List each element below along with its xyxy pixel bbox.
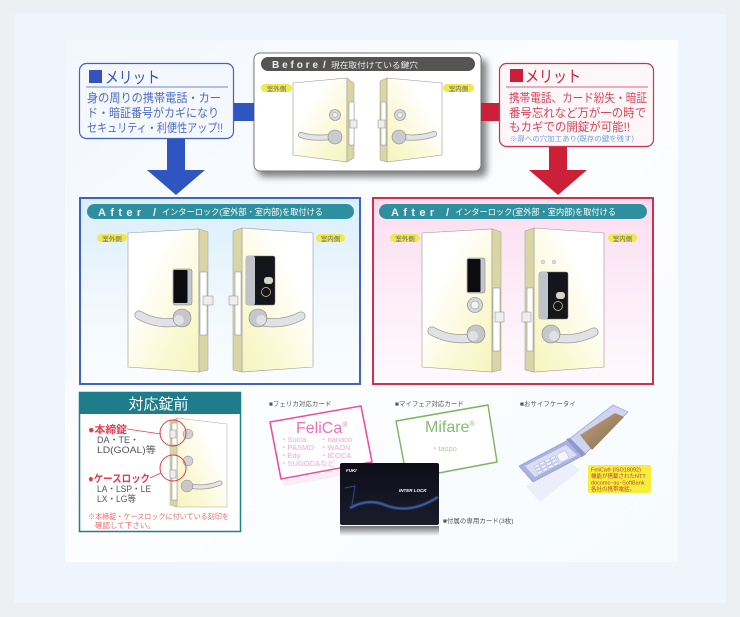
heading: merit blue — [89, 70, 160, 87]
icon: card reader — [467, 258, 485, 293]
text: merit red body: 携帯電話、カード紛失・暗証 — [509, 90, 647, 105]
arrow: red down — [529, 147, 587, 195]
label: indoor side — [316, 234, 345, 243]
callout: main lock: ●本締錠 — [88, 423, 128, 436]
card: FeliCa: ® — [342, 421, 348, 429]
text: merit red body: 番号忘れなど万が一の時で — [509, 105, 646, 120]
note: red merit: ※扉への穴加工あり(既存の鍵を残す) — [510, 134, 634, 143]
panel: red merit — [500, 64, 654, 146]
callout: FeliCa phones — [588, 465, 651, 493]
panel: after blue — [80, 198, 360, 384]
card: Inter Lock: INTER LOCK — [399, 488, 427, 493]
arrow: blue down — [147, 139, 205, 195]
label: outdoor side: 室外側 — [395, 234, 415, 243]
heading: after blue: After / — [98, 207, 156, 219]
label: indoor side: 室内側 — [449, 84, 469, 93]
card: Mifare: ■マイフェア対応カード — [395, 399, 464, 408]
card: Inter Lock — [340, 463, 439, 536]
door: after red outdoor — [422, 229, 504, 372]
callout: FeliCa phones: 各社の携帯電話。 — [591, 485, 635, 493]
callout: case lock — [88, 455, 186, 504]
card: FeliCa: ・Edy — [280, 451, 301, 460]
heading: compatible locks — [79, 392, 241, 414]
callout: case lock: ●ケースロック — [88, 473, 150, 485]
heading: before: 現在取付けている鍵穴 — [331, 60, 418, 70]
icon: key cylinder — [468, 298, 482, 312]
text: merit red body — [509, 90, 647, 134]
heading: after blue — [87, 204, 354, 219]
icon: mobile phone: ■おサイフケータイ — [520, 399, 576, 408]
note: engraving: 確認して下さい。 — [95, 520, 155, 530]
door: lock diagram — [170, 418, 227, 507]
note: engraving: ※本締錠・ケースロックに付いている刻印を — [88, 511, 229, 521]
icon: mobile phone — [519, 399, 628, 502]
heading: before: Before — [272, 60, 318, 71]
card: Mifare: Mifare — [425, 419, 469, 436]
card: FeliCa: ・Suica — [280, 435, 307, 444]
door: after blue outdoor — [128, 229, 213, 372]
card: FeliCa: ・SUGOCAなど — [280, 459, 336, 468]
connector: blue — [233, 103, 254, 121]
card: FeliCa: FeliCa — [296, 420, 342, 437]
card: FeliCa: ■フェリカ対応カード — [269, 399, 331, 408]
card: FeliCa: ・nanaco — [320, 435, 352, 444]
connector: red — [481, 103, 500, 121]
card: Mifare: ® — [469, 420, 475, 428]
heading: after red: インターロック(室外部・室内部)を取付ける — [455, 207, 616, 217]
label: outdoor side: 室外側 — [102, 234, 122, 243]
label: indoor side: 室内側 — [613, 234, 633, 243]
heading: after blue: インターロック(室外部・室内部)を取付ける — [162, 207, 323, 217]
heading: after red: After / — [391, 207, 449, 219]
card: Inter Lock: FUKI — [346, 468, 357, 473]
callout: main lock: DA・TE・ — [97, 435, 139, 445]
icon: lock unit — [539, 272, 568, 319]
text: merit blue body: 身の周りの携帯電話・カー — [87, 90, 221, 105]
callout: case lock: LX・LG等 — [97, 493, 136, 504]
label: outdoor side: 室外側 — [267, 84, 287, 93]
callout: main lock — [88, 420, 186, 455]
card: Mifare: ・taspo — [431, 444, 457, 453]
card: FeliCa: ・PASMO — [280, 443, 314, 452]
callout: FeliCa phones: 機能が搭載されたNTT — [591, 472, 646, 480]
heading: before: / — [323, 60, 326, 71]
text: merit blue body — [87, 90, 223, 135]
label: outdoor side — [261, 84, 292, 93]
door: after red indoor — [522, 228, 604, 372]
card: FeliCa: ・ICOCA — [320, 451, 351, 460]
label: indoor side — [608, 234, 637, 243]
icon: card reader — [173, 269, 192, 305]
panel: before — [254, 53, 487, 177]
callout: FeliCa phones: docomo･au･SoftBank — [591, 480, 645, 486]
note: engraving — [88, 511, 229, 530]
label: outdoor side — [390, 234, 420, 243]
card: FeliCa: ・WAON — [320, 443, 351, 452]
card: Mifare — [395, 399, 497, 479]
door: before outdoor — [293, 78, 357, 162]
door: before indoor — [378, 78, 442, 162]
caption: included card: ■付属の専用カード(3枚) — [443, 516, 513, 525]
icon: lock unit — [246, 256, 275, 305]
label: indoor side — [443, 84, 474, 93]
callout: main lock: LD(GOAL)等 — [97, 444, 156, 455]
label: indoor side: 室内側 — [321, 234, 341, 243]
text: merit blue body: ド・暗証番号がカギになり — [87, 105, 219, 120]
label: outdoor side — [97, 234, 127, 243]
callout: case lock: LA・LSP・LE — [97, 484, 151, 494]
heading: before — [261, 57, 475, 71]
callout: FeliCa phones: FeliCa® (ISO18092) — [591, 466, 641, 474]
heading: merit red: メリット — [525, 69, 581, 86]
panel: compatible locks — [79, 392, 241, 532]
heading: after red — [379, 204, 647, 219]
text: merit red body: もカギでの開錠が可能!! — [509, 119, 630, 134]
heading: compatible locks: 対応錠前 — [128, 396, 189, 413]
heading: merit blue: メリット — [105, 70, 160, 87]
panel: after red — [373, 198, 653, 384]
card: FeliCa — [269, 399, 374, 486]
panel: blue merit — [80, 64, 234, 138]
door: after blue indoor — [229, 228, 313, 372]
text: merit blue body: セキュリティ・利便性アップ!! — [87, 121, 223, 135]
